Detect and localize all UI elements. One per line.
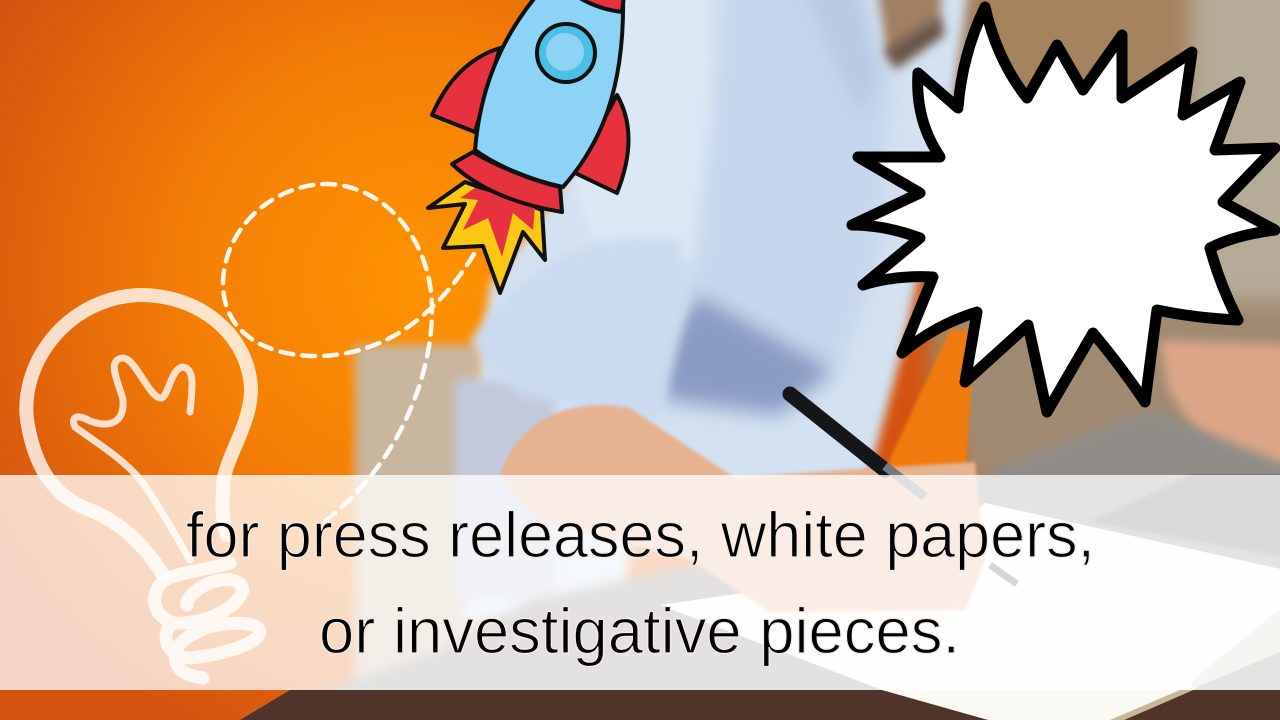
wall and chair xyxy=(930,0,1280,440)
laptop keyboard xyxy=(1090,475,1280,560)
rocket left fin xyxy=(432,48,500,132)
arrow: dashed flight loop xyxy=(223,184,474,525)
starburst callout xyxy=(852,7,1275,412)
rocket right fin xyxy=(575,95,628,193)
caption line 2: or investigative pieces. xyxy=(319,595,960,667)
wood table xyxy=(240,690,1280,720)
rocket flame xyxy=(428,182,545,293)
right hand xyxy=(1160,340,1280,470)
rocket nozzle xyxy=(452,152,562,212)
caption line 1: for press releases, white papers, xyxy=(186,499,1095,571)
rocket porthole xyxy=(537,24,595,82)
desk xyxy=(900,410,1280,720)
pen xyxy=(790,394,1017,584)
notebook xyxy=(660,503,1280,720)
rocket body xyxy=(475,0,623,187)
icon: light bulb outline xyxy=(26,295,260,678)
shirt xyxy=(460,0,975,620)
forearm and writing hand xyxy=(500,405,985,612)
icon: rocket xyxy=(428,0,628,293)
neck xyxy=(870,0,945,60)
translucent caption band xyxy=(0,475,1280,690)
caption text xyxy=(186,499,1095,667)
rocket nose xyxy=(575,0,624,12)
